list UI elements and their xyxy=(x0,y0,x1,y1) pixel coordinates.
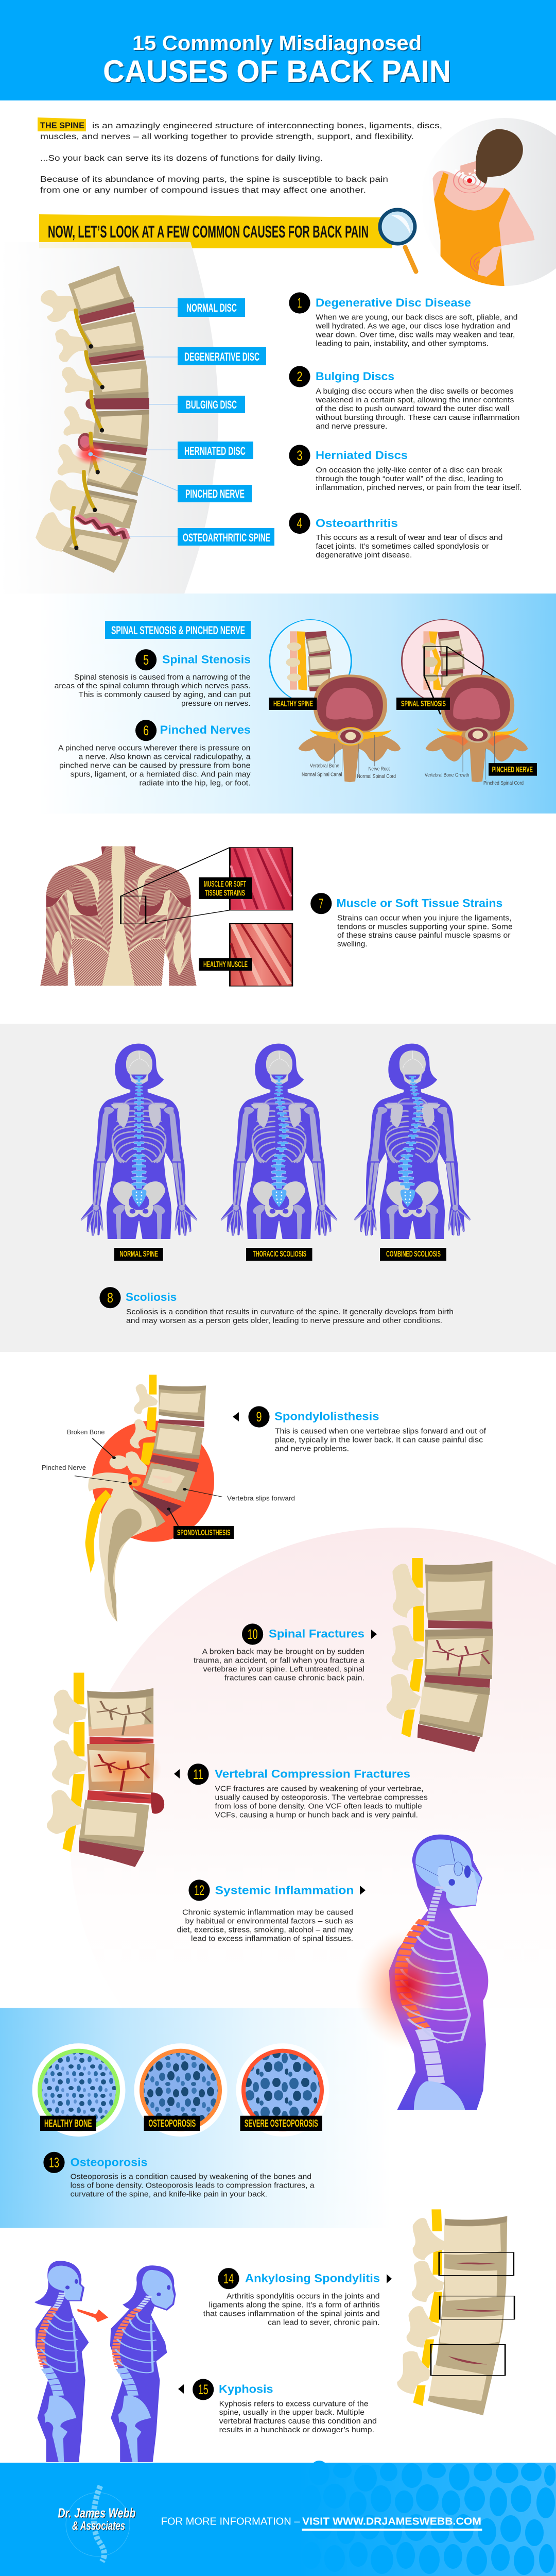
cause 6: pinched nerves: a nerve. Also known as cervical radiculopathy, a xyxy=(78,753,251,761)
cause 13: osteoporosis: curvature of the spine, and knife-like pain in your back. xyxy=(71,2191,267,2199)
illustration: systemic inflammation body xyxy=(355,1835,488,2111)
label connector lines xyxy=(89,308,178,536)
cause 2: bulging discs: A bulging disc occurs when the disc swells or becomes xyxy=(316,387,513,396)
zoom box xyxy=(424,647,494,715)
cause 3: herniated discs: inflammation, pinched nerves, or pain from the tear itself. xyxy=(316,484,522,492)
cause 2: bulging discs: without bursting through. These can cause inflammation xyxy=(315,414,519,422)
cause 1: degenerative disc disease xyxy=(289,292,517,348)
cause 10: spinal fractures: fractures can cause chronic back pain. xyxy=(224,1674,364,1683)
cause 11: vertebral compression fractures: usually caused by osteoporosis. The vertebrae compresses xyxy=(215,1794,428,1802)
panel background: grey curve behind spine xyxy=(39,242,218,594)
muscle labels: HEALTHY MUSCLE xyxy=(203,960,248,969)
cause 4: osteoarthritis xyxy=(289,513,502,560)
cause 7: muscle or soft tissue strains: tendons or muscles supporting your spine. Some xyxy=(337,923,513,931)
cause 15: kyphosis: Kyphosis refers to excess curvature of the xyxy=(219,2400,369,2408)
spondylolisthesis labels: Pinched Nerve xyxy=(42,1464,86,1471)
cause 8: scoliosis: Scoliosis xyxy=(126,1291,177,1303)
cause 4: osteoarthritis: facet joints. It’s sometimes called spondylosis or xyxy=(316,543,489,551)
cause 11: vertebral compression fractures: from loss of bone density. One VCF often leads to multiple xyxy=(215,1802,422,1810)
figure: thoracic scoliosis xyxy=(221,1044,337,1239)
background: pink curve xyxy=(70,1528,556,2151)
bone sample: osteoporosis xyxy=(134,2043,228,2137)
cause 6: pinched nerves: pinched nerve can be caused by pressure from bone xyxy=(59,762,250,770)
cause 13: osteoporosis: Osteoporosis is a condition caused by weakening of the bones and xyxy=(71,2173,311,2181)
cause 15: kyphosis xyxy=(178,2379,377,2434)
figure: combined scoliosis xyxy=(354,1044,471,1239)
panel: spinal stenosis and pinched nerve xyxy=(0,594,556,814)
cause 1: degenerative disc disease: wear down. Over time, disc walls may weaken and tear, xyxy=(315,331,515,340)
healthy muscle swatch xyxy=(230,924,292,986)
muscle close-ups xyxy=(121,848,292,986)
spinal stenosis tag xyxy=(105,621,251,639)
diagram labels: Normal Spinal Canal xyxy=(302,772,342,778)
cause 10: spinal fractures: trauma, an accident, or fall when you fracture a xyxy=(194,1657,365,1665)
cause 2: bulging discs: weakened in a certain spot, allowing the inner contents xyxy=(315,396,514,404)
pinched nerve ring xyxy=(129,1477,142,1486)
cause 8: scoliosis: Scoliosis is a condition that results in curvature of the spine. It generally develops from birth xyxy=(126,1308,454,1316)
labels: disc conditions: PINCHED NERVE xyxy=(185,487,245,500)
cause 10: spinal fractures: 10 xyxy=(248,1626,258,1642)
intro paragraph: from one or any number of compound issues that may affect one another. xyxy=(40,186,366,195)
cause 2: bulging discs: and nerve pressure. xyxy=(316,422,387,431)
highlight: the spine: THE SPINE xyxy=(40,121,84,130)
cause 8: scoliosis xyxy=(99,1287,454,1325)
labels: disc conditions: DEGENERATIVE DISC xyxy=(184,350,259,363)
lower vertebra xyxy=(79,1800,149,1867)
diagram: spinal stenosis xyxy=(402,620,528,782)
logo: Dr. James Webb & Associates: Dr. James Webb xyxy=(58,2505,136,2521)
cause 5: spinal stenosis xyxy=(55,649,251,708)
cause 9: spondylolisthesis: 9 xyxy=(256,1409,262,1425)
cause 4: osteoarthritis: 4 xyxy=(297,515,303,531)
cause 14: ankylosing spondylitis: ligaments along the spine. It’s a form of arthritis xyxy=(209,2301,380,2310)
icon: arrow to kyphosis xyxy=(77,2309,108,2322)
cause 10: spinal fractures: Spinal Fractures xyxy=(269,1628,364,1640)
muscle labels: MUSCLE OR SOFT xyxy=(204,880,246,889)
cause 11: vertebral compression fractures: VCFs, causing a hump or hunch back and is very painful. xyxy=(215,1811,418,1819)
cause 6: pinched nerves: A pinched nerve occurs wherever there is pressure on xyxy=(58,744,250,753)
illustration: woman with neck and back pain xyxy=(421,118,556,287)
cause 11: vertebral compression fractures: 11 xyxy=(193,1767,203,1782)
footer panel xyxy=(0,2461,556,2576)
cause 5: spinal stenosis: areas of the spinal column through which nerves pass. xyxy=(55,682,251,690)
cause 7: muscle or soft tissue strains: 7 xyxy=(319,896,323,911)
cause 1: degenerative disc disease: well hydrated. As we age, our discs lose hydration and xyxy=(315,323,510,331)
cause 5: spinal stenosis: Spinal stenosis is caused from a narrowing of the xyxy=(74,673,250,682)
degenerative disc xyxy=(89,350,145,366)
cause 9: spondylolisthesis: place, typically in the lower back. It can cause painful disc xyxy=(275,1436,483,1445)
cause 14: ankylosing spondylitis xyxy=(203,2268,392,2327)
call to action text: VISIT WWW.DRJAMESWEBB.COM xyxy=(302,2516,481,2528)
diagram: healthy spine xyxy=(270,620,401,782)
diagram labels: Pinched Spinal Cord xyxy=(483,781,524,786)
diagram labels: Vertebral Bone Growth xyxy=(425,773,470,778)
cause 15: kyphosis: vertebral fractures cause this condition and xyxy=(219,2417,377,2426)
diagram labels: Normal Spinal Cord xyxy=(357,774,396,779)
cause 13: osteoporosis: 13 xyxy=(49,2155,59,2170)
cause 1: degenerative disc disease: Degenerative Disc Disease xyxy=(316,296,471,309)
cause 14: ankylosing spondylitis: 14 xyxy=(223,2271,234,2286)
cause 3: herniated discs: 3 xyxy=(297,448,303,463)
cause 1: degenerative disc disease: When we are young, our back discs are soft, pliable, and xyxy=(316,314,517,322)
muscle labels xyxy=(199,877,252,971)
cause 15: kyphosis: 15 xyxy=(198,2382,208,2397)
bone sample: healthy bone xyxy=(32,2043,126,2137)
axial vertebra with narrowed canal xyxy=(426,674,528,782)
cause 12: systemic inflammation: by habitual or environmental factors – such as xyxy=(185,1918,353,1926)
cause 8: scoliosis: and may worsen as a person gets older, leading to nerve pressure and other conditions. xyxy=(126,1317,442,1325)
spondylolisthesis labels xyxy=(42,1429,295,1539)
logo: Dr. James Webb & Associates xyxy=(58,2486,136,2562)
illustration: spondylolisthesis xyxy=(75,1375,222,1622)
cause 13: osteoporosis: Osteoporosis xyxy=(71,2156,148,2168)
panel: osteoporosis xyxy=(0,2008,391,2228)
cause 8: scoliosis: 8 xyxy=(107,1290,113,1306)
cause 1: degenerative disc disease: leading to pain, instability, and other symptoms. xyxy=(316,340,489,348)
cause 12: systemic inflammation: Chronic systemic inflammation may be caused xyxy=(182,1909,353,1917)
figure: kyphosis posture xyxy=(110,2265,176,2462)
intro paragraph: is an amazingly engineered structure of interconnecting bones, ligaments, discs, xyxy=(92,122,442,130)
cause 6: pinched nerves: 6 xyxy=(143,723,149,738)
cause 10: spinal fractures: A broken back may be brought on by sudden xyxy=(202,1648,364,1656)
cause 11: vertebral compression fractures: VCF fractures are caused by weakening of your vertebrae, xyxy=(215,1785,423,1793)
cause 3: herniated discs: through the tough “outer wall” of the disc, leading to xyxy=(316,475,503,483)
cause 7: muscle or soft tissue strains: of these strains cause painful muscle spasms or xyxy=(337,931,511,940)
illustration: spinal fracture xyxy=(387,1558,493,1752)
cause 12: systemic inflammation: Systemic Inflammation xyxy=(215,1884,354,1897)
cause 3: herniated discs: Herniated Discs xyxy=(316,449,408,462)
scoliosis labels: THORACIC SCOLIOSIS xyxy=(253,1250,306,1259)
normal disc xyxy=(79,302,135,325)
spinal stenosis tag: SPINAL STENOSIS & PINCHED NERVE xyxy=(111,624,245,637)
intro paragraph: ...So your back can serve its its dozens of functions for daily living. xyxy=(40,154,323,163)
cause 2: bulging discs: 2 xyxy=(297,369,303,384)
title line one: 15 Commonly Misdiagnosed xyxy=(132,32,422,55)
bone sample: healthy bone: HEALTHY BONE xyxy=(44,2118,92,2129)
diagram labels: Nerve Root xyxy=(369,766,390,772)
scoliosis labels: COMBINED SCOLIOSIS xyxy=(386,1250,441,1259)
cause 1: degenerative disc disease: 1 xyxy=(298,295,302,311)
cause 2: bulging discs: of the disc to push outward toward the outer disc wall xyxy=(316,405,509,413)
labels: disc conditions: NORMAL DISC xyxy=(186,301,237,314)
cause 6: pinched nerves xyxy=(58,720,251,788)
bone sample: severe osteoporosis: SEVERE OSTEOPOROSIS xyxy=(245,2118,318,2129)
figure: upright posture xyxy=(34,2261,89,2462)
cause 10: spinal fractures xyxy=(194,1623,377,1683)
cause 5: spinal stenosis: 5 xyxy=(143,652,149,668)
cause 4: osteoarthritis: degenerative joint disease. xyxy=(316,551,412,560)
cause 15: kyphosis: Kyphosis xyxy=(219,2383,273,2396)
scoliosis labels xyxy=(114,1248,446,1261)
cause 6: pinched nerves: spurs, ligament, or a herniated disc. And pain may xyxy=(71,771,251,779)
bone sample: severe osteoporosis xyxy=(236,2043,329,2137)
cause 11: vertebral compression fractures: Vertebral Compression Fractures xyxy=(215,1768,410,1781)
cause 7: muscle or soft tissue strains xyxy=(310,893,513,948)
cause 14: ankylosing spondylitis: Arthritis spondylitis occurs in the joints and xyxy=(227,2293,380,2301)
intro paragraph xyxy=(38,117,442,195)
cause 5: spinal stenosis: pressure on nerves. xyxy=(181,700,250,708)
cause 14: ankylosing spondylitis: Ankylosing Spondylitis xyxy=(245,2272,380,2284)
cause 11: vertebral compression fractures xyxy=(174,1764,428,1819)
labels: disc conditions xyxy=(178,298,274,546)
cause 12: systemic inflammation xyxy=(177,1879,366,1943)
cause 5: spinal stenosis: This is commonly caused by aging, and can put xyxy=(78,691,250,699)
cause 10: spinal fractures: vertebrae in your spine. Left untreated, spinal xyxy=(203,1666,364,1674)
intro paragraph: muscles, and nerves – all working together to provide strength, support, and flexibility. xyxy=(40,132,414,141)
call to action text xyxy=(161,2516,482,2531)
banner: now let's look xyxy=(39,214,392,248)
cause 13: osteoporosis: loss of bone density. Osteoporosis leads to compression fractures, a xyxy=(71,2182,315,2190)
cause 14: ankylosing spondylitis: that causes inflammation of the spinal joints and xyxy=(203,2310,380,2318)
scoliosis labels: NORMAL SPINE xyxy=(119,1250,158,1259)
pinched nerve glow xyxy=(75,444,106,465)
spondylolisthesis labels: Vertebra slips forward xyxy=(227,1495,295,1502)
call to action text: FOR MORE INFORMATION – xyxy=(161,2516,300,2528)
icon: magnifying glass xyxy=(380,210,416,272)
cause 15: kyphosis: spine, usually in the upper back. Multiple xyxy=(219,2409,364,2417)
panel: scoliosis xyxy=(0,1024,556,1352)
cause 6: pinched nerves: Pinched Nerves xyxy=(160,723,251,736)
cause 7: muscle or soft tissue strains: Muscle or Soft Tissue Strains xyxy=(336,897,502,910)
bulging disc xyxy=(85,398,149,410)
osteoarthritic disc xyxy=(76,516,126,539)
figure: normal spine xyxy=(81,1044,197,1239)
nerve roots xyxy=(72,310,102,548)
intro paragraph: Because of its abundance of moving parts, the spine is susceptible to back pain xyxy=(40,175,388,184)
cause 9: spondylolisthesis: and nerve problems. xyxy=(275,1445,349,1453)
cause 13: osteoporosis xyxy=(43,2152,315,2199)
logo: Dr. James Webb & Associates: & Associates xyxy=(72,2519,125,2533)
spondylolisthesis labels: Broken Bone xyxy=(67,1429,105,1436)
cause 7: muscle or soft tissue strains: Strains can occur when you injure the ligaments, xyxy=(337,914,512,922)
axial vertebra view xyxy=(299,674,401,782)
cause 15: kyphosis: results in a hunchback or dowager’s hump. xyxy=(219,2426,374,2434)
cause 14: ankylosing spondylitis: can lead to sever, chronic pain. xyxy=(268,2319,380,2327)
labels: disc conditions: BULGING DISC xyxy=(186,398,237,411)
cause 9: spondylolisthesis: Spondylolisthesis xyxy=(274,1410,379,1423)
cause 4: osteoarthritis: Osteoarthritis xyxy=(316,517,398,530)
spondylolisthesis labels: SPONDYLOLISTHESIS xyxy=(177,1529,231,1537)
cause 3: herniated discs: On occasion the jelly-like center of a disc can break xyxy=(316,466,502,474)
cause 6: pinched nerves: radiate into the hip, leg, or foot. xyxy=(139,779,250,788)
cause 5: spinal stenosis: Spinal Stenosis xyxy=(162,653,251,666)
labels: disc conditions: HERNIATED DISC xyxy=(184,445,246,457)
labels: disc conditions: OSTEOARTHRITIC SPINE xyxy=(183,531,270,544)
cause 4: osteoarthritis: This occurs as a result of wear and tear of discs and xyxy=(316,534,502,542)
cause 7: muscle or soft tissue strains: swelling. xyxy=(337,940,368,948)
strained muscle swatch xyxy=(230,848,292,910)
title line two: CAUSES OF BACK PAIN xyxy=(103,54,451,89)
muscle labels: TISSUE STRAINS xyxy=(205,889,245,897)
highlight: the spine xyxy=(38,117,86,131)
cause 12: systemic inflammation: lead to excess inflammation of spinal tissues. xyxy=(191,1935,353,1943)
cause 2: bulging discs: Bulging Discs xyxy=(316,370,394,383)
cause 9: spondylolisthesis: This is caused when one vertebrae slips forward and out of xyxy=(275,1428,486,1436)
diagram labels: Vertebral Bone xyxy=(310,764,339,769)
bone sample: osteoporosis: OSTEOPOROSIS xyxy=(148,2118,196,2129)
injury highlight box and zoom lines xyxy=(121,848,230,924)
cause 2: bulging discs xyxy=(289,366,519,431)
cause 3: herniated discs xyxy=(289,445,522,492)
figures: normal posture versus kyphosis xyxy=(34,2261,176,2462)
diagram labels: HEALTHY SPINE xyxy=(273,700,313,708)
illustration: ankylosing spine xyxy=(397,2209,514,2415)
illustration: side view of the spine with disc conditions xyxy=(36,266,178,573)
diagram labels xyxy=(269,698,537,786)
white mask under pink background ending before blue panel xyxy=(0,2008,556,2162)
cause 12: systemic inflammation: diet, exercise, stress, smoking, alcohol – and may xyxy=(177,1926,354,1935)
diagram labels: SPINAL STENOSIS xyxy=(401,700,446,708)
cause 9: spondylolisthesis xyxy=(233,1406,486,1453)
header banner xyxy=(0,0,556,100)
skull xyxy=(415,1839,481,1906)
herniated disc xyxy=(78,433,147,455)
cause 12: systemic inflammation: 12 xyxy=(194,1883,204,1898)
illustration: vertebral compression fracture xyxy=(47,1673,164,1867)
illustration: back muscles xyxy=(40,846,197,986)
sacrum xyxy=(88,1472,182,1622)
